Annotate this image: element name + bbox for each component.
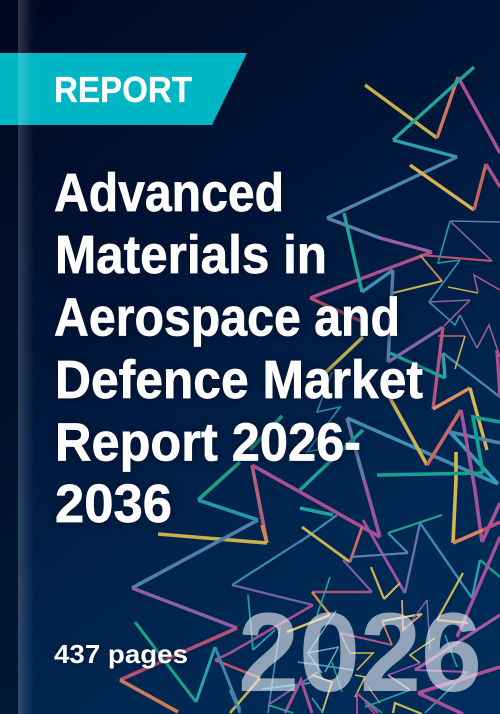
thin outline shapes, upper — [307, 221, 500, 452]
thick outline shapes, upper — [310, 67, 500, 450]
title: 2036 — [55, 474, 172, 534]
watermark-area shapes, digits 2 and 6 — [340, 633, 392, 645]
title: Aerospace and — [54, 288, 400, 348]
title: Materials in — [55, 225, 327, 285]
book spine shading — [0, 0, 34, 714]
title: Report 2026- — [55, 412, 361, 472]
page count: 437 pages — [54, 639, 188, 669]
title: Defence Market — [55, 350, 423, 410]
thick outline shapes, middle — [120, 398, 500, 712]
watermark-area shapes, digits 2 and 0 — [308, 611, 339, 653]
title — [54, 163, 423, 534]
watermark year: 2026 — [238, 590, 482, 714]
geometric line artwork — [120, 67, 500, 714]
title: Advanced — [54, 163, 284, 223]
banner: report label — [0, 53, 247, 125]
thin and medium outline shapes, lower — [135, 515, 500, 714]
banner: report label: REPORT — [54, 69, 192, 110]
